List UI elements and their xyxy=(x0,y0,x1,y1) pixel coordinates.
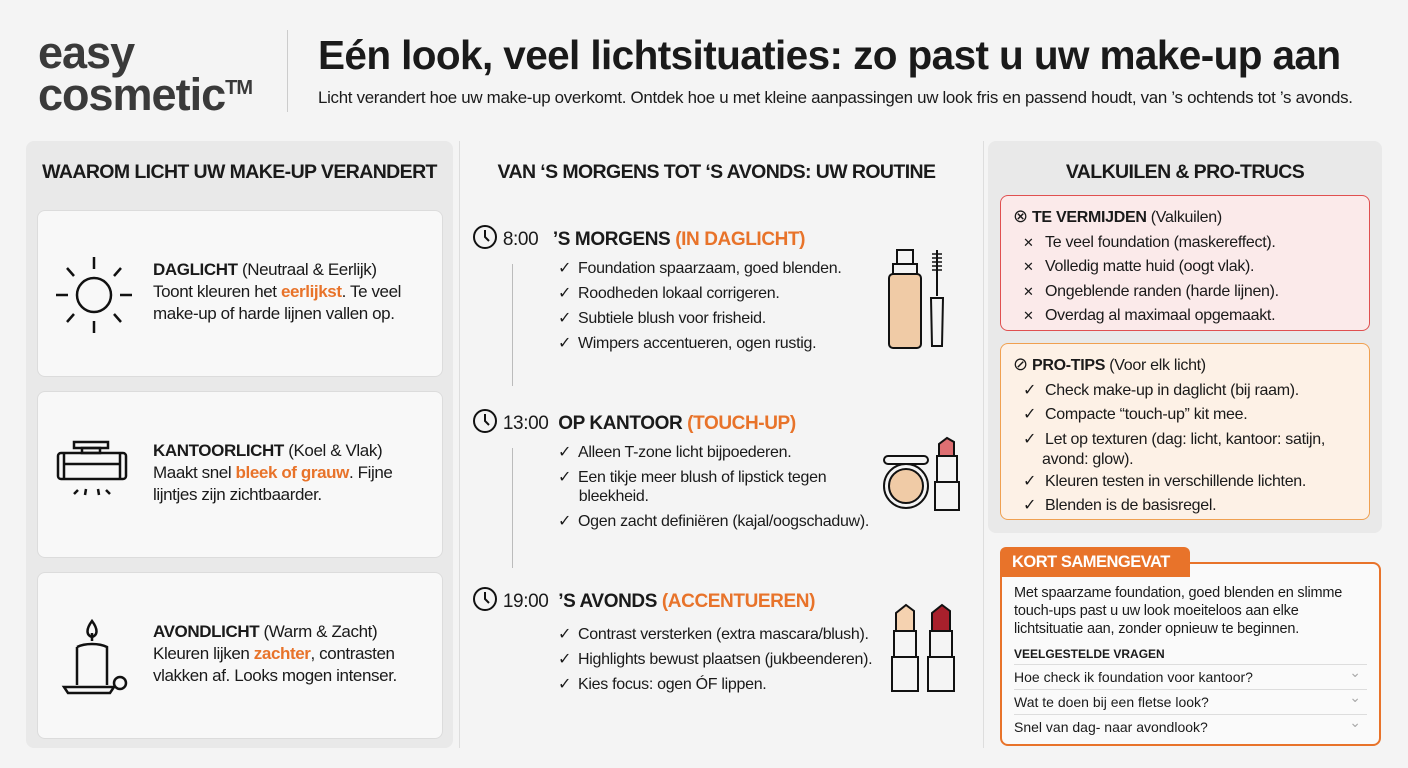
card: daglicht: Toont kleuren het eerlijkst. Te veel make-up of harde lijnen vallen op. xyxy=(153,282,401,323)
subtitle: Licht verandert hoe uw make-up overkomt. Ontdek hoe u met kleine aanpassingen uw look fris en passend houdt, van ’s ochtends tot ’s avonds. xyxy=(318,88,1353,107)
text: bleekheid. xyxy=(579,488,649,505)
card: avondlicht: AVONDLICHT (Warm & Zacht) xyxy=(153,622,377,641)
icon: sun xyxy=(56,257,132,333)
summary tab xyxy=(1000,547,1190,577)
icon: candle xyxy=(62,619,128,694)
text: Wimpers accentueren, ogen rustig. xyxy=(578,335,816,352)
icon: two lipsticks xyxy=(891,604,955,692)
logo: easy xyxy=(38,27,134,78)
box: pro tips: Check make-up in daglicht (bij raam). xyxy=(1045,382,1299,398)
card: daglicht: DAGLICHT (Neutraal & Eerlijk) xyxy=(153,260,377,279)
card: kantoorlicht: Maakt snel bleek of grauw. Fijne lijntjes zijn zichtbaarder. xyxy=(153,463,392,504)
heading: VALKUILEN & PRO-TRUCS xyxy=(1066,161,1304,183)
panel: pitfalls & pro tricks xyxy=(988,141,1382,533)
heading: WAAROM LICHT UW MAKE-UP VERANDERT xyxy=(42,161,437,183)
icon: foundation and mascara xyxy=(888,249,944,349)
card: daglicht xyxy=(37,210,443,377)
box: avoid xyxy=(1000,195,1370,331)
summary box: Wat te doen bij een fletse look? xyxy=(1014,694,1209,710)
text: Subtiele blush voor frisheid. xyxy=(578,310,766,327)
box: avoid: Ongeblende randen (harde lijnen). xyxy=(1045,282,1279,300)
box: pro tips: Blenden is de basisregel. xyxy=(1045,497,1216,514)
row 19:00: 19:00 ’S AVONDS (ACCENTUEREN) xyxy=(503,591,815,612)
text: Een tikje meer blush of lipstick tegen xyxy=(578,469,826,486)
box: pro tips xyxy=(1000,343,1370,520)
row 8:00: 8:00 ’S MORGENS (IN DAGLICHT) xyxy=(503,229,805,250)
card: avondlicht: Kleuren lijken zachter, contrasten vlakken af. Looks mogen intenser. xyxy=(153,644,397,685)
logo xyxy=(38,27,252,120)
icon: powder and lipstick xyxy=(883,436,960,511)
heading: VAN ‘S MORGENS TOT ‘S AVONDS: UW ROUTINE xyxy=(498,161,935,183)
row 13:00: 13:00 OP KANTOOR (TOUCH-UP) xyxy=(503,413,796,434)
text: Contrast versterken (extra mascara/blush). xyxy=(578,626,869,643)
card: kantoorlicht xyxy=(37,391,443,558)
text: Highlights bewust plaatsen (jukbeenderen). xyxy=(578,651,872,668)
box: avoid: Te veel foundation (maskereffect). xyxy=(1045,234,1276,250)
box: pro tips: Kleuren testen in verschillende lichten. xyxy=(1045,472,1306,490)
box: pro tips: ⊘ PRO-TIPS (Voor elk licht) xyxy=(1013,354,1206,374)
panel: why light changes xyxy=(26,141,453,748)
summary box: Snel van dag- naar avondlook? xyxy=(1014,719,1208,735)
card: avondlicht xyxy=(37,572,443,739)
title: Eén look, veel lichtsituaties: zo past u uw make-up aan xyxy=(318,32,1341,78)
text: Ogen zacht definiëren (kajal/oogschaduw). xyxy=(578,513,869,530)
text: Foundation spaarzaam, goed blenden. xyxy=(578,260,841,277)
text: Roodheden lokaal corrigeren. xyxy=(578,285,780,302)
text: Kies focus: ogen ÓF lippen. xyxy=(578,676,766,693)
box: avoid: Volledig matte huid (oogt vlak). xyxy=(1045,258,1254,275)
card: kantoorlicht: KANTOORLICHT (Koel & Vlak) xyxy=(153,441,382,460)
logo: cosmeticTM xyxy=(38,69,252,120)
text: Alleen T-zone licht bijpoederen. xyxy=(578,444,791,461)
summary box: VEELGESTELDE VRAGEN xyxy=(1014,647,1165,661)
box: pro tips: avond: glow). xyxy=(1042,450,1133,468)
box: avoid: ⊗ TE VERMIJDEN (Valkuilen) xyxy=(1013,206,1222,226)
summary tab: KORT SAMENGEVAT xyxy=(1012,553,1170,571)
box: pro tips: Compacte “touch-up” kit mee. xyxy=(1045,406,1247,423)
box: avoid: Overdag al maximaal opgemaakt. xyxy=(1045,307,1275,324)
icon: office lamp xyxy=(56,440,128,496)
summary box: Met spaarzame foundation, goed blenden en slimme touch-ups past u uw look moeiteloos aan elke lichtsituatie aan, zonder opnieuw te beginnen. xyxy=(1014,585,1342,637)
summary box: Hoe check ik foundation voor kantoor? xyxy=(1014,669,1253,685)
summary box xyxy=(1000,562,1381,746)
box: pro tips: Let op texturen (dag: licht, kantoor: satijn, xyxy=(1045,430,1325,448)
